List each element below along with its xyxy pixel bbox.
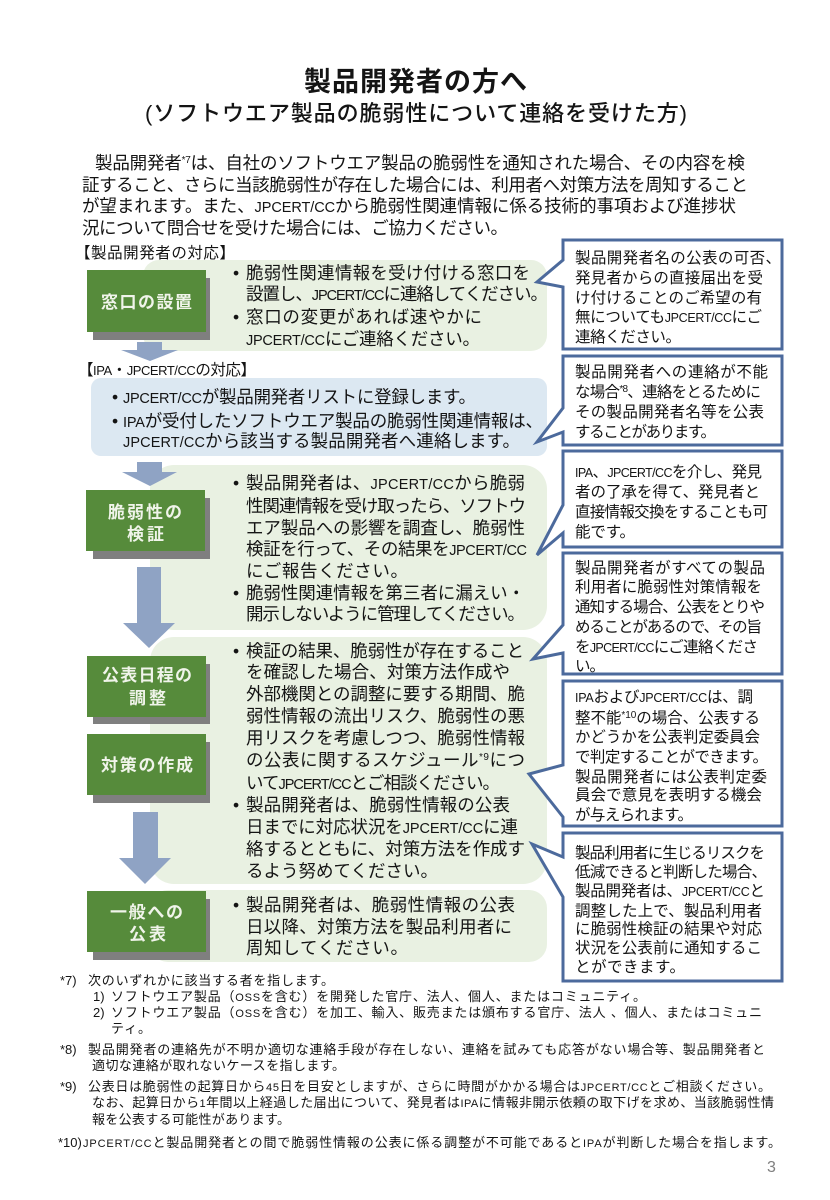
callout 3 [537, 451, 782, 555]
panel: publication: 製品開発者は、脆弱性情報の公表 [246, 895, 515, 915]
panel: verification: にご報告ください。 [246, 561, 408, 581]
footnotes: ティ。 [111, 1021, 151, 1036]
panel: schedule and countermeasure: につ [489, 750, 525, 770]
panel: verification: 製品開発者は、JPCERT/CCから脆弱 [246, 473, 525, 493]
panel: schedule and countermeasure: • [233, 641, 239, 661]
callout 5: の場合、公表する [636, 709, 760, 727]
panel: verification: 脆弱性関連情報を第三者に漏えい・ [246, 583, 525, 603]
intro text: 製品開発者 [95, 153, 182, 173]
callout 1: 無についてもJPCERT/CCにご [575, 308, 762, 326]
callout 5: 製品開発者には公表判定委 [575, 768, 767, 786]
footnotes: 製品開発者の連絡先が不明か適切な連絡手段が存在しない、連絡を試みても応答がない場合等、製品開発者と [88, 1042, 765, 1057]
panel: schedule and countermeasure [150, 637, 547, 884]
panel: contact point: 設置し、JPCERT/CCに連絡してください。 [246, 284, 548, 304]
callout 5: IPAおよびJPCERT/CCは、調 [575, 688, 753, 706]
box: publication: 公表 [129, 925, 166, 944]
callout 4: をJPCERT/CCにご連絡くださ [575, 638, 758, 656]
callout 3: 者の了承を得て、発見者と [575, 483, 760, 501]
callout 2: することがあります。 [575, 423, 716, 441]
callout 5: 員会で意見を表明する機会 [575, 786, 762, 804]
intro text [82, 153, 748, 238]
callout 1 [537, 240, 782, 349]
intro text: は、自社のソフトウエア製品の脆弱性を通知された場合、その内容を検 [191, 153, 745, 173]
box: schedule [87, 656, 210, 724]
callout 2: その製品開発者名等を公表 [575, 403, 764, 421]
panel: schedule and countermeasure: • [233, 795, 239, 815]
panel: contact point: • [233, 307, 239, 327]
panel: contact point: 窓口の変更があれば速やかに [246, 307, 482, 327]
callout 2: *8 [619, 384, 628, 395]
callout 3: 直接情報交換をすることも可 [575, 503, 768, 521]
panel: schedule and countermeasure: *9 [479, 752, 489, 763]
footnotes: *7) [60, 973, 77, 988]
callout 5 [529, 681, 782, 826]
callout 4: 通知する場合、公表をとりや [575, 598, 765, 616]
box: verification: 脆弱性の [108, 503, 182, 522]
page number: 3 [767, 1159, 776, 1176]
panel: contact point [143, 260, 548, 351]
footnotes: *10) [58, 1135, 82, 1150]
callout 2: 製品開発者への連絡が不能 [575, 363, 768, 381]
callout 4 [533, 553, 782, 675]
callout 6: 調整した上で、製品利用者 [575, 902, 762, 920]
footnotes: 次のいずれかに該当する者を指します。 [88, 973, 334, 988]
panel: IPA JPCERT response: JPCERT/CCから該当する製品開発者へ連絡します。 [123, 431, 520, 451]
footnotes [58, 973, 781, 1150]
panel: schedule and countermeasure: いてJPCERT/CCとご相談ください。 [246, 773, 500, 793]
callout 2: な場合 [575, 384, 620, 401]
callout 6: 低減できると判断した場合、 [575, 863, 767, 881]
panel: schedule and countermeasure: 用リスクを考慮しつつ、脆弱性情報 [246, 728, 525, 748]
panel: schedule and countermeasure: 絡するとともに、対策方法を作成す [246, 839, 525, 859]
footnotes: 1) [93, 989, 105, 1004]
box: publication [87, 891, 210, 960]
callout 5: が与えられます。 [575, 806, 693, 824]
callout 6: 状況を公表前に通知するこ [575, 939, 762, 957]
panel: schedule and countermeasure: 製品開発者は、脆弱性情報の公表 [246, 795, 510, 815]
box: schedule: 公表日程の [102, 666, 192, 685]
box: schedule: 調整 [129, 689, 166, 708]
arrow 3 [123, 567, 175, 648]
footnotes: 2) [93, 1005, 105, 1020]
box: contact point [87, 270, 210, 340]
footnotes: JPCERT/CCと製品開発者との間で脆弱性情報の公表に係る調整が不可能であるとIPAが判断した場合を指します。 [83, 1135, 781, 1150]
callout 1: け付けることのご希望の有 [575, 289, 762, 307]
footnotes: *8) [60, 1042, 77, 1057]
callout 4: 製品開発者がすべての製品 [575, 559, 765, 577]
box: countermeasure: 対策の作成 [101, 755, 193, 775]
panel: schedule and countermeasure: の公表に関するスケジュール [246, 750, 478, 770]
callout 1: 製品開発者名の公表の可否、 [575, 249, 781, 267]
callout 4: 利用者に脆弱性対策情報を [575, 578, 762, 596]
panel: contact point: • [233, 263, 239, 283]
panel: schedule and countermeasure: 検証の結果、脆弱性が存在すること [246, 641, 524, 661]
heading: IPA JPCERT response: 【IPA・JPCERT/CCの対応】 [78, 361, 256, 379]
arrow 2 [122, 462, 177, 486]
panel: schedule and countermeasure: 外部機関との調整に要する期間、脆 [246, 684, 525, 704]
panel: verification [150, 465, 547, 630]
panel: schedule and countermeasure: 日までに対応状況をJPCERT/CCに連 [246, 817, 518, 837]
panel: IPA JPCERT response: JPCERT/CCが製品開発者リストに登録します。 [123, 387, 476, 407]
callout 6: 製品利用者に生じるリスクを [575, 844, 765, 862]
callout 1: 連絡ください。 [575, 328, 681, 346]
panel: verification: 性関連情報を受け取ったら、ソフトウ [246, 496, 526, 516]
callout 3: 能です。 [575, 523, 635, 541]
callout 6: に脆弱性検証の結果や対応 [575, 920, 762, 938]
panel: IPA JPCERT response: IPAが受付したソフトウエア製品の脆弱性関連情報は、 [123, 411, 543, 431]
box: countermeasure [87, 734, 210, 803]
panel: IPA JPCERT response [91, 378, 547, 456]
footnotes: ソフトウエア製品（OSSを含む）を開発した官庁、法人、個人、またはコミュニティ。 [111, 989, 646, 1004]
callout 4: めることがあるので、その旨 [575, 618, 762, 636]
panel: publication: 周知してください。 [246, 938, 408, 958]
intro text: が望まれます。また、JPCERT/CCから脆弱性関連情報に係る技術的事項および進捗状 [82, 196, 736, 216]
title: (ソフトウエア製品の脆弱性について連絡を受けた方) [145, 101, 687, 126]
callout 5: かどうかを公表判定委員会 [575, 728, 760, 746]
panel: verification: 開示しないように管理してください。 [246, 604, 525, 624]
intro text: 証すること、さらに当該脆弱性が存在した場合には、利用者へ対策方法を周知すること [82, 175, 748, 195]
box: verification: 検証 [127, 525, 164, 544]
panel: contact point: 脆弱性関連情報を受け付ける窓口を [246, 263, 530, 283]
callout 3: IPA、JPCERT/CCを介し、発見 [575, 463, 762, 481]
panel: IPA JPCERT response: • [112, 387, 118, 407]
box: publication: 一般への [110, 903, 183, 922]
panel: schedule and countermeasure: 弱性情報の流出リスク、脆弱性の悪 [246, 706, 525, 726]
callout 6: とができます。 [575, 958, 685, 976]
panel: verification: 検証を行って、その結果をJPCERT/CC [246, 539, 527, 559]
panel: publication: 日以降、対策方法を製品利用者に [246, 917, 512, 937]
callout 5: 整不能 [575, 710, 621, 727]
panel: schedule and countermeasure: を確認した場合、対策方法作成や [246, 662, 510, 682]
title: 製品開発者の方へ [304, 67, 527, 97]
intro text: 況について問合せを受けた場合には、ご協力ください。 [82, 218, 508, 238]
panel: verification: • [233, 583, 239, 603]
callout 6: 製品開発者は、JPCERT/CCと [575, 882, 765, 900]
panel: verification: • [233, 473, 239, 493]
callout 2 [537, 356, 782, 445]
panel: publication: • [233, 895, 239, 915]
callout 1: 発見者からの直接届出を受 [575, 269, 763, 287]
footnotes: ソフトウエア製品（OSSを含む）を加工、輸入、販売または頒布する官庁、法人 、個人、またはコミュニ [111, 1005, 762, 1020]
arrow 4 [119, 812, 171, 884]
box: verification [86, 490, 210, 559]
panel: publication [150, 890, 547, 962]
heading: developer response: 【製品開発者の対応】 [75, 244, 235, 262]
panel: verification: エア製品への影響を調査し、脆弱性 [246, 518, 525, 538]
footnotes: 適切な連絡が取れないケースを指します。 [92, 1058, 345, 1073]
footnotes: なお、起算日から1年間以上経過した届出について、発見者はIPAに情報非開示依頼の取下げを求め、当該脆弱性情 [92, 1095, 774, 1110]
panel: schedule and countermeasure: るよう努めてください。 [246, 861, 438, 881]
arrow 1 [121, 342, 178, 361]
footnotes: 公表日は脆弱性の起算日から45日を目安としますが、さらに時間がかかる場合はJPCERT/CCとご相談ください。 [88, 1079, 771, 1094]
callout 4: い。 [575, 658, 605, 675]
panel: contact point: JPCERT/CCにご連絡ください。 [246, 329, 480, 349]
box: contact point: 窓口の設置 [101, 293, 192, 312]
intro text: *7 [182, 155, 191, 166]
title [145, 67, 687, 126]
footnotes: 報を公表する可能性があります。 [92, 1112, 290, 1127]
callout 6 [532, 833, 782, 981]
callout 2: 、連絡をとるために [627, 383, 761, 401]
footnotes: *9) [60, 1079, 77, 1094]
callout 5: *10 [621, 710, 637, 721]
callout 5: で判定することができます。 [575, 748, 768, 766]
panel: IPA JPCERT response: • [112, 411, 118, 431]
